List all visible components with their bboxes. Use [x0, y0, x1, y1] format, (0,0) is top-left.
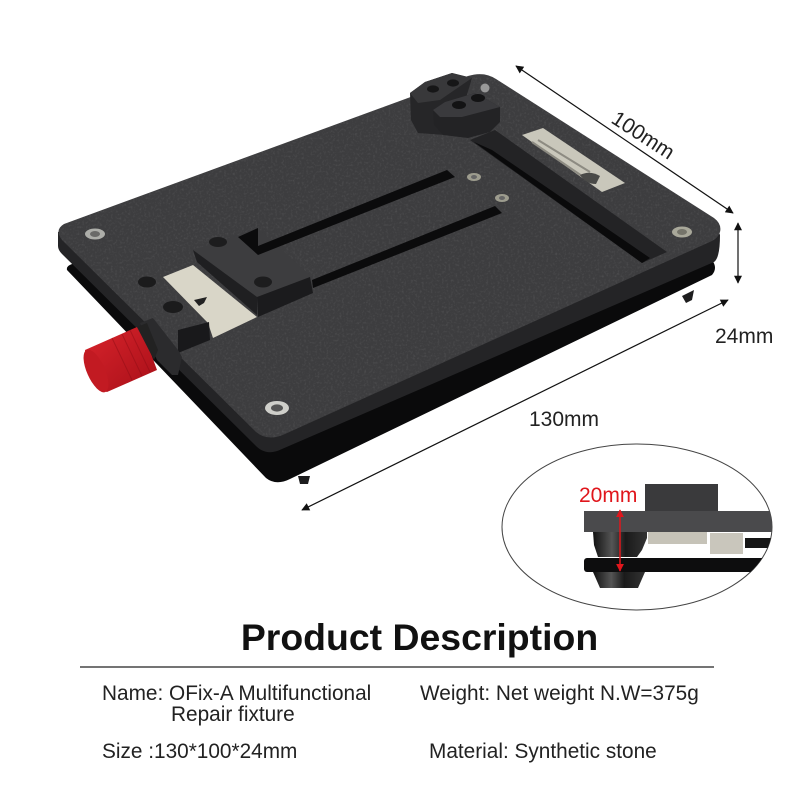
rear clamp blocks	[410, 73, 500, 138]
spec: name: Repair fixture	[171, 703, 295, 726]
dimension: 24mm	[715, 223, 773, 348]
label plate	[522, 128, 625, 192]
plate edge	[58, 225, 720, 452]
inset outline	[502, 444, 772, 610]
spec: material: Material: Synthetic stone	[429, 740, 657, 763]
red knob	[78, 323, 158, 396]
inset: 20mm side detail	[502, 444, 775, 610]
silver clamp plate	[163, 265, 257, 338]
stone texture	[58, 74, 720, 438]
inset cross-section	[584, 484, 775, 588]
dimension: 100mm: 100mm	[607, 107, 679, 164]
upper slot	[238, 170, 455, 255]
rear feet	[298, 290, 694, 484]
spec: size: Size :130*100*24mm	[102, 740, 297, 763]
dimension: 100mm	[516, 66, 733, 213]
infographic canvas	[58, 66, 772, 762]
lower slot	[312, 206, 502, 288]
top plate face	[58, 74, 720, 438]
dimension: 24mm: 24mm	[715, 325, 773, 348]
bottom plate	[67, 260, 715, 482]
inset: 20mm side detail: 20mm	[579, 484, 637, 507]
near clamp block	[138, 276, 210, 375]
right long slot	[470, 130, 667, 263]
fixture photo illustration	[58, 73, 720, 484]
20mm arrow	[619, 510, 621, 571]
front slider block	[193, 228, 313, 317]
spec: name: Name: OFix-A Multifunctional	[102, 682, 371, 705]
heading: Product Description	[241, 616, 598, 658]
diamond hole	[194, 297, 207, 306]
dimension: 130mm	[302, 300, 728, 510]
divider	[80, 666, 714, 668]
dimension: 130mm: 130mm	[529, 408, 599, 431]
spec: weight: Weight: Net weight N.W=375g	[420, 682, 699, 705]
corner screws	[85, 84, 692, 415]
